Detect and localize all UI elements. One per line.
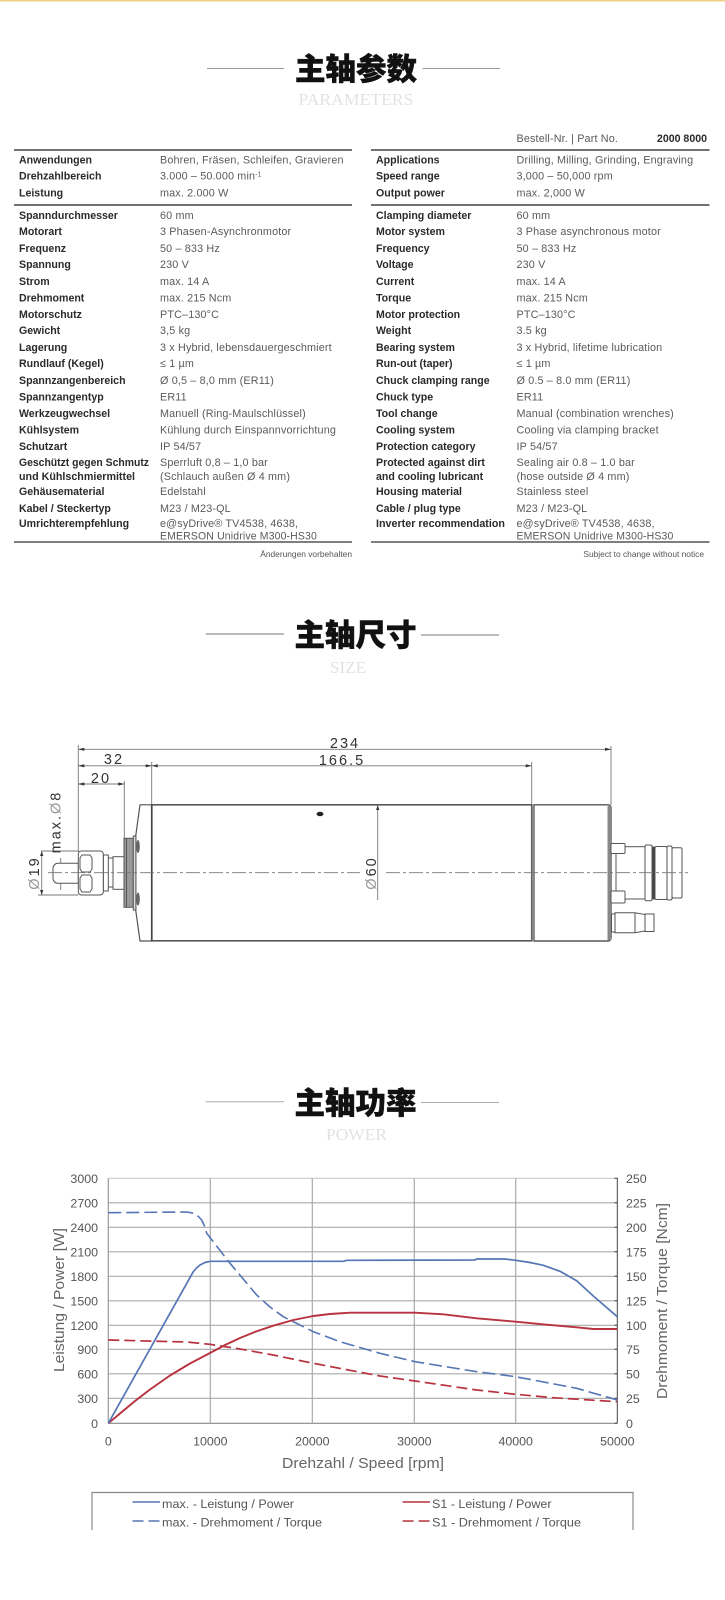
left axis labels: 600 bbox=[77, 1368, 98, 1382]
left axis labels: 2100 bbox=[70, 1246, 98, 1260]
dimension arrows bbox=[40, 748, 611, 895]
panel: German parameter table: Spannzangenbereich bbox=[19, 375, 126, 387]
x axis labels: 40000 bbox=[498, 1434, 533, 1448]
marker dot bbox=[316, 812, 324, 816]
x axis labels: 0 bbox=[105, 1434, 112, 1448]
panel: English parameter table: Speed range bbox=[376, 170, 440, 182]
panel: German parameter table: 3,5 kg bbox=[160, 325, 190, 337]
panel: English parameter table: max. 2,000 W bbox=[516, 188, 586, 200]
panel: German parameter table: Edelstahl bbox=[160, 486, 206, 498]
dimension lines bbox=[38, 745, 611, 895]
left axis labels: 2700 bbox=[70, 1196, 98, 1210]
panel: English parameter table: Chuck clamping range bbox=[376, 375, 490, 387]
left axis labels: 2400 bbox=[70, 1221, 98, 1235]
panel: German parameter table: Drehzahlbereich bbox=[19, 170, 101, 182]
left axis labels: 3000 bbox=[70, 1172, 98, 1186]
chart legend: S1 - Drehmoment / Torque bbox=[432, 1516, 581, 1530]
panel: English parameter table: Motor protection bbox=[376, 309, 460, 321]
panel: German parameter table: max. 14 A bbox=[160, 276, 210, 288]
right axis labels: 50 bbox=[626, 1368, 640, 1382]
right axis labels: 225 bbox=[626, 1196, 647, 1210]
right axis labels: 75 bbox=[626, 1343, 640, 1357]
x axis labels bbox=[105, 1434, 635, 1448]
panel: German parameter table: Rundlauf (Kegel) bbox=[19, 358, 104, 370]
panel: German parameter table: 3 Phasen-Asynchronmotor bbox=[160, 226, 292, 238]
axis title: torque: Drehmoment / Torque [Ncm] bbox=[655, 1203, 671, 1399]
heading: parameters: PARAMETERS bbox=[298, 90, 414, 109]
panel: German parameter table: Spannzangentyp bbox=[19, 392, 104, 404]
left axis labels: 1800 bbox=[70, 1270, 98, 1284]
right axis bbox=[614, 1178, 617, 1423]
panel: English parameter table bbox=[371, 150, 710, 559]
panel: German parameter table: und Kühlschmiermittel bbox=[19, 471, 135, 483]
panel: German parameter table: Umrichterempfehlung bbox=[19, 518, 129, 530]
panel: English parameter table: Stainless steel bbox=[516, 486, 588, 498]
spindle body bbox=[136, 805, 611, 941]
panel: English parameter table: max. 215 Ncm bbox=[516, 292, 588, 304]
panel: English parameter table: Chuck type bbox=[376, 392, 433, 404]
panel: German parameter table: M23 / M23-QL bbox=[160, 503, 231, 515]
panel: German parameter table: Kühlsystem bbox=[19, 424, 79, 436]
dimension labels: 166.5 bbox=[319, 753, 365, 769]
left axis labels bbox=[70, 1172, 98, 1431]
panel: German parameter table: Änderungen vorbehalten bbox=[260, 549, 352, 559]
dimension labels: 32 bbox=[104, 752, 124, 768]
dimension labels: Ø60 bbox=[364, 856, 380, 890]
panel: English parameter table: (hose outside Ø 4 mm) bbox=[516, 471, 629, 483]
panel: English parameter table: Voltage bbox=[376, 259, 414, 271]
panel: German parameter table: Geschützt gegen Schmutz bbox=[19, 457, 149, 469]
part number: 2000 8000 bbox=[657, 133, 707, 145]
panel: German parameter table: e@syDrive® TV4538, 4638, bbox=[160, 518, 298, 530]
panel: English parameter table: Drilling, Milling, Grinding, Engraving bbox=[516, 154, 693, 166]
panel: English parameter table: PTC–130°C bbox=[516, 309, 576, 321]
panel: English parameter table: Ø 0.5 – 8.0 mm (ER11) bbox=[516, 375, 630, 387]
panel: German parameter table: Bohren, Fräsen, Schleifen, Gravieren bbox=[160, 154, 344, 166]
panel: English parameter table: Torque bbox=[376, 292, 411, 304]
heading: size: 主轴尺寸 bbox=[294, 611, 416, 655]
panel: German parameter table: 3 x Hybrid, lebensdauergeschmiert bbox=[160, 342, 332, 354]
part number bbox=[516, 133, 707, 145]
panel: English parameter table: 3.5 kg bbox=[516, 325, 547, 337]
panel: German parameter table: Schutzart bbox=[19, 441, 68, 453]
panel: English parameter table: Subject to change without notice bbox=[583, 549, 704, 559]
panel: German parameter table: PTC–130°C bbox=[160, 309, 219, 321]
panel: German parameter table: Ø 0,5 – 8,0 mm (ER11) bbox=[160, 375, 274, 387]
curve: max torque bbox=[108, 1212, 617, 1400]
dimension labels bbox=[27, 736, 380, 890]
panel: English parameter table: Weight bbox=[376, 325, 412, 337]
right axis labels: 0 bbox=[626, 1417, 633, 1431]
dimension labels: max.Ø8 bbox=[48, 791, 64, 853]
mounting bolts bbox=[136, 840, 140, 906]
panel: English parameter table: Manual (combination wrenches) bbox=[516, 408, 674, 420]
panel: English parameter table: 3,000 – 50,000 rpm bbox=[516, 170, 613, 182]
heading: power: 主轴功率 bbox=[294, 1079, 416, 1123]
x axis labels: 50000 bbox=[600, 1434, 635, 1448]
power and torque chart bbox=[52, 1172, 671, 1472]
panel: German parameter table: -1 bbox=[255, 172, 262, 178]
x axis labels: 20000 bbox=[295, 1434, 330, 1448]
right axis labels: 150 bbox=[626, 1270, 647, 1284]
panel: German parameter table: Motorart bbox=[19, 226, 62, 238]
panel: English parameter table: 230 V bbox=[516, 259, 546, 271]
left axis labels: 1200 bbox=[70, 1319, 98, 1333]
panel: German parameter table: Strom bbox=[19, 276, 50, 288]
heading: size: SIZE bbox=[330, 658, 366, 677]
panel: German parameter table: IP 54/57 bbox=[160, 441, 201, 453]
panel: English parameter table: Run-out (taper) bbox=[376, 358, 452, 370]
panel: German parameter table: ≤ 1 µm bbox=[160, 358, 194, 370]
panel: German parameter table: (Schlauch außen Ø 4 mm) bbox=[160, 471, 290, 483]
curve: S1 power bbox=[108, 1313, 617, 1423]
panel: English parameter table: Inverter recommendation bbox=[376, 518, 505, 530]
panel: English parameter table: Bearing system bbox=[376, 342, 455, 354]
panel: English parameter table: 60 mm bbox=[516, 210, 550, 222]
heading: parameters: 主轴参数 bbox=[295, 45, 417, 89]
panel: English parameter table: IP 54/57 bbox=[516, 441, 558, 453]
axis title: speed: Drehzahl / Speed [rpm] bbox=[282, 1456, 444, 1472]
panel: German parameter table bbox=[14, 150, 352, 559]
part number: Bestell-Nr. | Part No. bbox=[516, 133, 618, 145]
right axis labels: 200 bbox=[626, 1221, 647, 1235]
panel: English parameter table: Applications bbox=[376, 154, 440, 166]
dimension labels: Ø19 bbox=[27, 856, 43, 890]
panel: English parameter table: 50 – 833 Hz bbox=[516, 243, 576, 255]
panel: German parameter table: 50 – 833 Hz bbox=[160, 243, 220, 255]
panel: English parameter table: Cable / plug type bbox=[376, 503, 461, 515]
panel: German parameter table: Gewicht bbox=[19, 325, 61, 337]
panel: English parameter table: ≤ 1 µm bbox=[516, 358, 551, 370]
panel: English parameter table: Cooling system bbox=[376, 424, 455, 436]
axis title: power: Leistung / Power [W] bbox=[52, 1228, 68, 1372]
panel: English parameter table: e@syDrive® TV4538, 4638, bbox=[516, 518, 655, 530]
panel: English parameter table: Current bbox=[376, 276, 415, 288]
panel: English parameter table: Clamping diameter bbox=[376, 210, 471, 222]
top accent bar bbox=[0, 0, 725, 2]
curve: max power bbox=[108, 1259, 617, 1423]
chart legend: max. - Leistung / Power bbox=[162, 1497, 294, 1511]
x axis labels: 10000 bbox=[193, 1434, 228, 1448]
panel: German parameter table: Drehmoment bbox=[19, 292, 85, 304]
panel: German parameter table: Spannung bbox=[19, 259, 71, 271]
right axis labels: 125 bbox=[626, 1294, 647, 1308]
diameter extension line bbox=[377, 805, 379, 900]
panel: German parameter table: 60 mm bbox=[160, 210, 194, 222]
heading: power bbox=[206, 1079, 499, 1144]
left axis labels: 1500 bbox=[70, 1294, 98, 1308]
chart legend: max. - Drehmoment / Torque bbox=[162, 1516, 322, 1530]
panel: English parameter table: Protected against dirt bbox=[376, 457, 485, 469]
right axis labels bbox=[626, 1172, 647, 1431]
panel: English parameter table: Sealing air 0.8 – 1.0 bar bbox=[516, 457, 635, 469]
panel: German parameter table: Gehäusematerial bbox=[19, 486, 104, 498]
panel: German parameter table: Frequenz bbox=[19, 243, 66, 255]
panel: English parameter table: and cooling lubricant bbox=[376, 471, 484, 483]
panel: German parameter table: Leistung bbox=[19, 188, 63, 200]
air hose fitting bbox=[612, 913, 654, 933]
panel: English parameter table: 3 x Hybrid, lifetime lubrication bbox=[516, 342, 662, 354]
dimension labels: 234 bbox=[330, 736, 360, 752]
panel: German parameter table: Anwendungen bbox=[19, 154, 92, 166]
panel: English parameter table: Cooling via clamping bracket bbox=[516, 424, 659, 436]
panel: German parameter table: 230 V bbox=[160, 259, 190, 271]
panel: English parameter table: M23 / M23-QL bbox=[516, 503, 587, 515]
panel: German parameter table: Manuell (Ring-Maulschlüssel) bbox=[160, 408, 306, 420]
panel: German parameter table: Werkzeugwechsel bbox=[19, 408, 110, 420]
right axis labels: 100 bbox=[626, 1319, 647, 1333]
panel: English parameter table: 3 Phase asynchronous motor bbox=[516, 226, 661, 238]
panel: German parameter table: EMERSON Unidrive M300-HS30 bbox=[160, 530, 317, 542]
chart legend bbox=[92, 1492, 633, 1530]
panel: English parameter table: Housing material bbox=[376, 486, 462, 498]
heading: size bbox=[206, 611, 499, 677]
panel: English parameter table: ER11 bbox=[516, 392, 543, 404]
rear connector bbox=[611, 844, 682, 903]
panel: German parameter table: Lagerung bbox=[19, 342, 67, 354]
panel: German parameter table: Kabel / Steckertyp bbox=[19, 503, 111, 515]
right axis labels: 175 bbox=[626, 1246, 647, 1260]
tool holder and collet nut bbox=[53, 836, 136, 910]
chart legend: S1 - Leistung / Power bbox=[432, 1497, 552, 1511]
heading: parameters bbox=[207, 45, 500, 109]
panel: English parameter table: Frequency bbox=[376, 243, 430, 255]
panel: German parameter table: Spanndurchmesser bbox=[19, 210, 118, 222]
panel: German parameter table: ER11 bbox=[160, 392, 187, 404]
panel: English parameter table: Protection category bbox=[376, 441, 476, 453]
panel: German parameter table: Sperrluft 0,8 – 1,0 bar bbox=[160, 457, 268, 469]
right axis labels: 250 bbox=[626, 1172, 647, 1186]
panel: English parameter table: Output power bbox=[376, 188, 445, 200]
x axis labels: 30000 bbox=[397, 1434, 432, 1448]
panel: English parameter table: EMERSON Unidrive M300-HS30 bbox=[516, 530, 674, 542]
panel: German parameter table: max. 2.000 W bbox=[160, 188, 229, 200]
centre line bbox=[48, 872, 688, 874]
panel: German parameter table: max. 215 Ncm bbox=[160, 292, 231, 304]
grid lines bbox=[108, 1178, 617, 1423]
panel: German parameter table: Kühlung durch Einspannvorrichtung bbox=[160, 424, 336, 436]
panel: German parameter table: Motorschutz bbox=[19, 309, 82, 321]
panel: English parameter table: Motor system bbox=[376, 226, 445, 238]
left axis labels: 0 bbox=[91, 1417, 98, 1431]
left axis labels: 300 bbox=[77, 1392, 98, 1406]
panel: English parameter table: max. 14 A bbox=[516, 276, 567, 288]
panel: German parameter table: 3.000 – 50.000 min bbox=[160, 170, 255, 182]
curve: S1 torque bbox=[108, 1340, 617, 1402]
panel: English parameter table: Tool change bbox=[376, 408, 438, 420]
right axis labels: 25 bbox=[626, 1392, 640, 1406]
left axis labels: 900 bbox=[77, 1343, 98, 1357]
dimension labels: 20 bbox=[91, 771, 111, 787]
heading: power: POWER bbox=[326, 1125, 388, 1144]
spindle dimension drawing bbox=[27, 736, 688, 941]
